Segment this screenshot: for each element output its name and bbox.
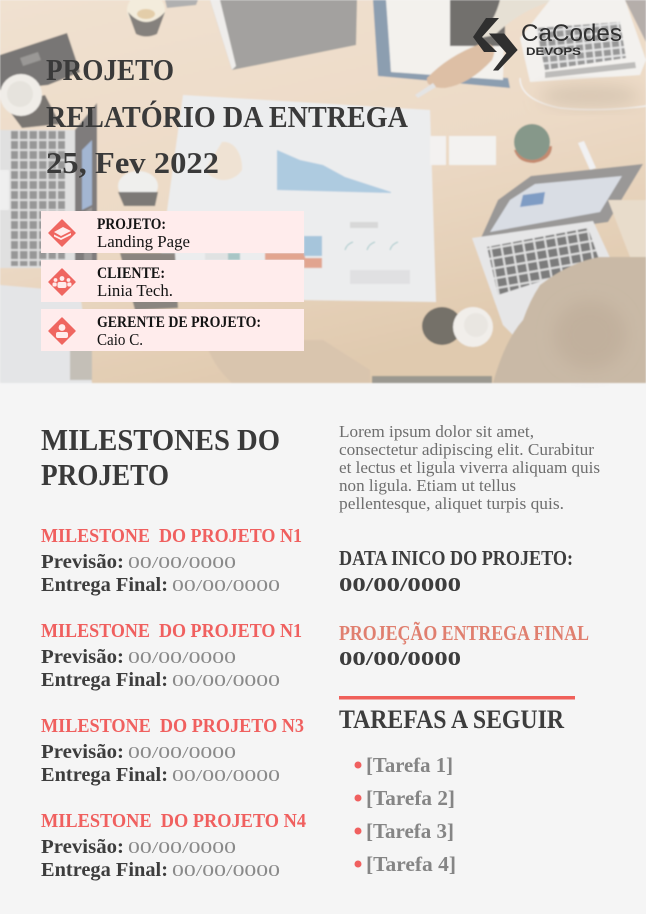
intro paragraph: consectetur adipiscing elit. Curabitur <box>339 440 595 459</box>
icon: book <box>49 220 75 246</box>
final delivery projection <box>339 621 589 670</box>
milestone 4: MILESTONE DO PROJETO N4 <box>41 810 306 832</box>
info card: cliente <box>41 260 304 302</box>
info card: projeto: Landing Page <box>97 232 190 251</box>
milestone 2: Previsão: <box>41 646 124 668</box>
milestone 1: Previsão: <box>41 551 124 573</box>
milestone 1: Entrega Final: <box>41 574 168 596</box>
intro paragraph: Lorem ipsum dolor sit amet, <box>339 422 534 441</box>
intro paragraph <box>339 422 600 513</box>
milestone 4: 00/00/0000 <box>128 838 236 857</box>
milestone 1: 00/00/0000 <box>128 553 236 572</box>
milestone 1 <box>41 525 302 596</box>
final delivery projection: 00/00/0000 <box>339 648 461 670</box>
icon: team <box>49 269 75 295</box>
task list: [Tarefa 1] <box>366 753 453 777</box>
heading: milestones: PROJETO <box>41 457 169 492</box>
intro paragraph: pellentesque, aliquet turpis quis. <box>339 494 564 513</box>
heading: tarefas a seguir: TAREFAS A SEGUIR <box>339 704 565 734</box>
milestone 4: Previsão: <box>41 836 124 858</box>
logo: CaCodes DevOps: DEVOPS <box>526 46 581 58</box>
title: PROJETO <box>46 52 174 87</box>
intro paragraph: et lectus et ligula viverra aliquam quis <box>339 458 600 477</box>
milestone 1: 00/00/0000 <box>172 576 280 595</box>
info card: cliente: CLIENTE: <box>97 265 165 282</box>
milestone 3: 00/00/0000 <box>128 743 236 762</box>
task list <box>354 753 456 876</box>
logo: CaCodes DevOps: CaCodes <box>521 20 622 47</box>
intro paragraph: non ligula. Etiam ut tellus <box>339 476 516 495</box>
icon: person <box>49 318 75 344</box>
milestone 3 <box>41 715 304 786</box>
task list: [Tarefa 2] <box>366 786 455 810</box>
milestone 2: MILESTONE DO PROJETO N1 <box>41 620 302 642</box>
final delivery projection: PROJEÇÃO ENTREGA FINAL <box>339 621 589 645</box>
milestone 3: Previsão: <box>41 741 124 763</box>
start date: 00/00/0000 <box>339 574 461 596</box>
heading: milestones: MILESTONES DO <box>41 422 280 457</box>
info card: projeto <box>41 211 304 253</box>
info card: projeto: PROJETO: <box>97 216 166 233</box>
task list: [Tarefa 4] <box>366 852 456 876</box>
info card: gerente de projeto: Caio C. <box>97 330 143 349</box>
hero photo of a desk <box>0 0 646 383</box>
title <box>46 52 409 180</box>
milestone 3: 00/00/0000 <box>172 766 280 785</box>
info card: gerente de projeto: GERENTE DE PROJETO: <box>97 314 261 331</box>
milestone 2: Entrega Final: <box>41 669 168 691</box>
milestone 2: 00/00/0000 <box>172 671 280 690</box>
title: RELATÓRIO DA ENTREGA <box>46 99 409 134</box>
milestone 2: 00/00/0000 <box>128 648 236 667</box>
start date <box>339 546 573 596</box>
milestone 4: Entrega Final: <box>41 859 168 881</box>
milestone 4: 00/00/0000 <box>172 861 280 880</box>
heading: milestones <box>41 422 280 492</box>
milestone 2 <box>41 620 302 691</box>
task list: [Tarefa 3] <box>366 819 454 843</box>
milestone 3: MILESTONE DO PROJETO N3 <box>41 715 304 737</box>
info card: cliente: Linia Tech. <box>97 281 173 300</box>
milestone 1: MILESTONE DO PROJETO N1 <box>41 525 302 547</box>
title: 25, Fev 2022 <box>46 145 219 180</box>
logo: CaCodes DevOps <box>473 18 622 70</box>
milestone 3: Entrega Final: <box>41 764 168 786</box>
milestone 4 <box>41 810 306 881</box>
info card: gerente de projeto <box>41 309 304 351</box>
start date: DATA INICO DO PROJETO: <box>339 546 573 570</box>
